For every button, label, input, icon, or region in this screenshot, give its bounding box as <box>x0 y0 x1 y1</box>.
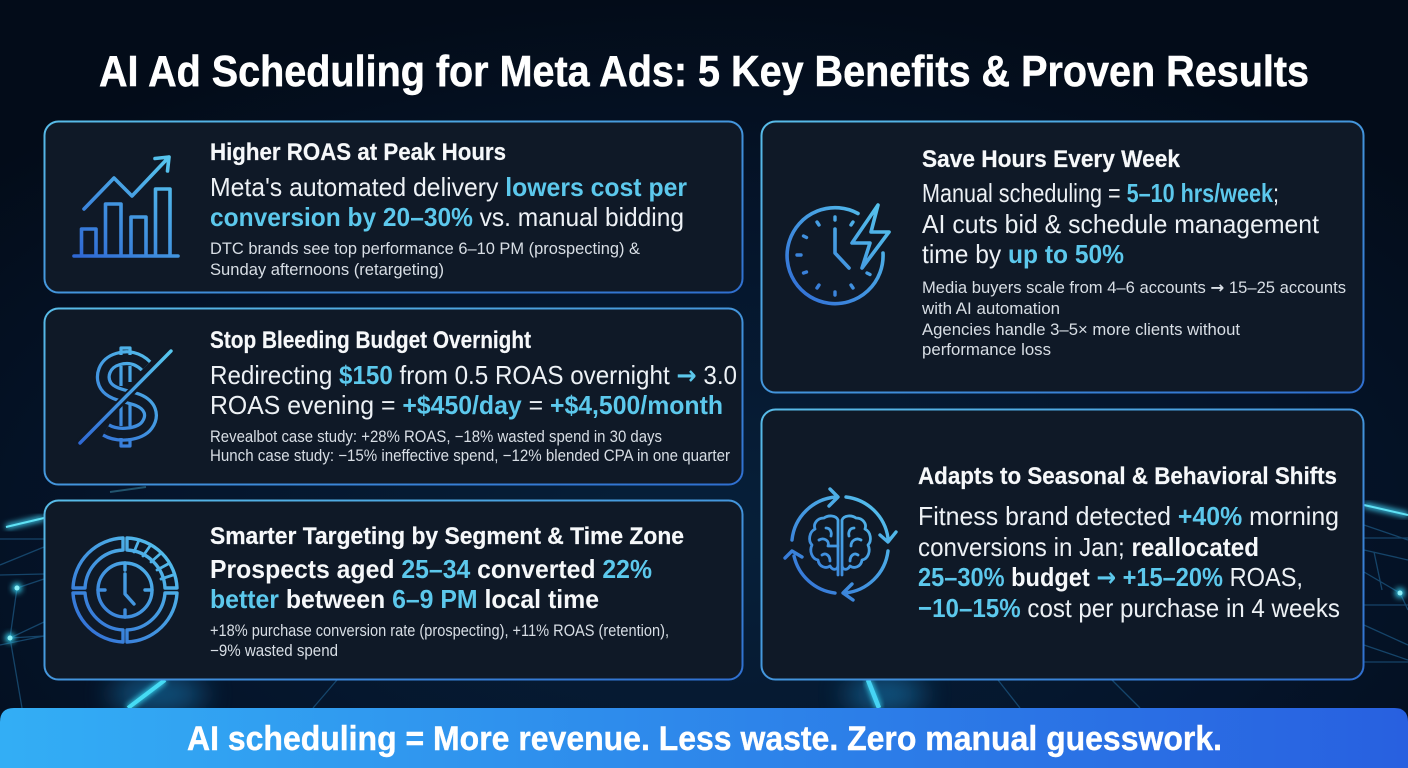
main text: ROAS evening = +$450/day = +$4,500/month <box>210 390 723 420</box>
main text: AI cuts bid & schedule management <box>922 209 1320 239</box>
main text: Fitness brand detected +40% morning <box>918 501 1339 531</box>
main text: Prospects aged 25–34 converted 22% <box>210 554 652 584</box>
detail text <box>210 622 669 660</box>
heading: Adapts to Seasonal & Behavioral Shifts <box>918 463 1337 490</box>
heading: Stop Bleeding Budget Overnight <box>210 327 531 354</box>
detail text: DTC brands see top performance 6–10 PM (prospecting) & <box>210 240 640 258</box>
footer text: AI scheduling = More revenue. Less waste. Zero manual guesswork. <box>187 720 1222 758</box>
heading: Smarter Targeting by Segment & Time Zone <box>210 523 684 550</box>
heading: Higher ROAS at Peak Hours <box>210 139 506 166</box>
main text <box>918 501 1340 623</box>
main text: Meta's automated delivery lowers cost per <box>210 172 687 202</box>
panel: smarter targeting <box>44 500 742 680</box>
main text: conversions in Jan; reallocated <box>918 532 1259 562</box>
panel: stop bleeding budget overnight <box>44 308 742 484</box>
detail text: −9% wasted spend <box>210 642 338 660</box>
detail text: Sunday afternoons (retargeting) <box>210 261 444 279</box>
main text: Redirecting $150 from 0.5 ROAS overnight → 3.0 <box>210 360 737 391</box>
detail text <box>210 428 730 465</box>
detail text <box>210 240 640 279</box>
main text: −10–15% cost per purchase in 4 weeks <box>918 593 1340 623</box>
icon: segmented clock dial <box>73 538 177 642</box>
detail text <box>921 278 1346 359</box>
detail text: Agencies handle 3–5× more clients without <box>922 321 1240 339</box>
detail text: with AI automation <box>921 300 1060 318</box>
main text <box>210 172 687 232</box>
icon: clock with lightning bolt <box>787 205 889 304</box>
main text <box>210 554 652 614</box>
detail text: Revealbot case study: +28% ROAS, −18% wasted spend in 30 days <box>210 428 662 446</box>
icon: brain with circular arrows <box>785 489 896 600</box>
detail text: +18% purchase conversion rate (prospecting), +11% ROAS (retention), <box>210 622 669 640</box>
heading: Save Hours Every Week <box>922 146 1181 173</box>
main text: conversion by 20–30% vs. manual bidding <box>210 202 684 232</box>
icon: crossed out dollar <box>80 348 172 446</box>
main text: time by up to 50% <box>922 239 1124 269</box>
detail text: Media buyers scale from 4–6 accounts → 15–25 accounts <box>922 278 1346 297</box>
main text: 25–30% budget → +15–20% ROAS, <box>918 562 1303 593</box>
main text: Manual scheduling = 5–10 hrs/week; <box>922 178 1279 208</box>
detail text: Hunch case study: −15% ineffective spend, −12% blended CPA in one quarter <box>210 447 730 465</box>
footer banner <box>0 708 1408 768</box>
panel: higher ROAS at peak hours <box>44 122 742 292</box>
title: AI Ad Scheduling for Meta Ads: 5 Key Benefits & Proven Results <box>99 47 1309 96</box>
main text: better between 6–9 PM local time <box>210 584 599 614</box>
icon: rising bar chart <box>74 157 178 256</box>
detail text: performance loss <box>922 341 1051 359</box>
panel: adapts to seasonal and behavioral shifts <box>762 410 1364 680</box>
main text <box>922 178 1320 269</box>
panel: save hours every week <box>762 122 1364 392</box>
main text <box>210 360 737 420</box>
